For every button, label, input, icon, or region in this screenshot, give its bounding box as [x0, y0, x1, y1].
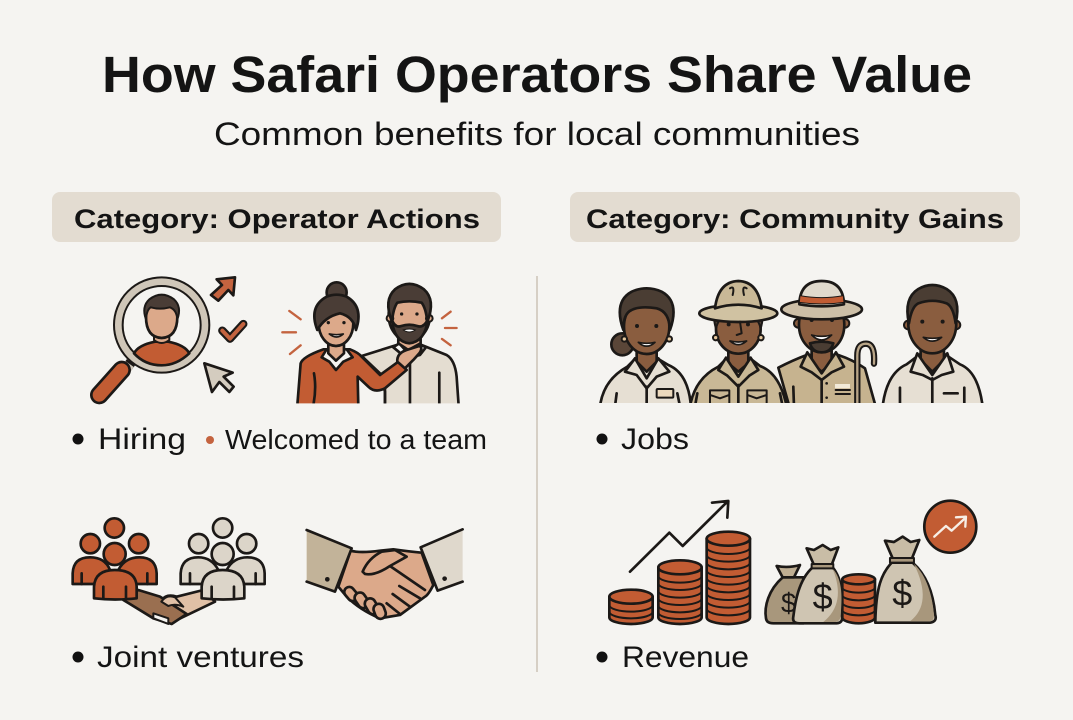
worker: ranger with flat hat	[690, 281, 787, 406]
large bag: $	[892, 572, 912, 613]
icon: growth badge	[924, 501, 976, 553]
icon: magnifying glass over candidate	[99, 282, 205, 395]
bullet label: hiring: Hiring	[98, 423, 186, 456]
bullet label: hiring	[72, 423, 186, 456]
middle bag	[793, 545, 842, 623]
bullet label: welcomed to a team: Welcomed to a team	[225, 424, 487, 455]
subtitle: Common benefits for local communities	[214, 116, 860, 152]
large bag	[875, 537, 936, 623]
bullet label: revenue: Revenue	[622, 641, 749, 674]
panel heading: community gains: Category: Community Gains	[586, 204, 1004, 234]
icon: arrow up	[211, 277, 235, 301]
icon: rising coin stacks with trend arrow	[609, 501, 750, 624]
middle bag: $	[813, 576, 833, 617]
small bag	[766, 565, 803, 623]
icon: four community workers	[600, 281, 983, 406]
bullet label: joint ventures: Joint ventures	[97, 641, 304, 674]
icon: handshake	[307, 529, 463, 620]
panel heading: community gains	[570, 192, 1020, 242]
icon: two groups joined by handshake	[73, 518, 265, 624]
title: How Safari Operators Share Value	[102, 46, 972, 103]
worker: man in light shirt	[883, 285, 983, 406]
panel heading: operator actions: Category: Operator Actions	[74, 204, 480, 234]
panel heading: operator actions	[52, 192, 501, 242]
worker: guide with hat and cane	[778, 281, 876, 406]
bullet label: jobs	[596, 423, 689, 456]
icon: welcomed colleagues	[282, 282, 459, 405]
worker: woman in light shirt	[600, 288, 691, 406]
bullet label: jobs: Jobs	[621, 423, 689, 456]
icon: check mark	[222, 324, 243, 339]
small bag: $	[781, 588, 796, 619]
icon: cursor	[204, 363, 234, 392]
coin stack	[842, 574, 875, 623]
icon: money bags and coins	[766, 537, 936, 623]
